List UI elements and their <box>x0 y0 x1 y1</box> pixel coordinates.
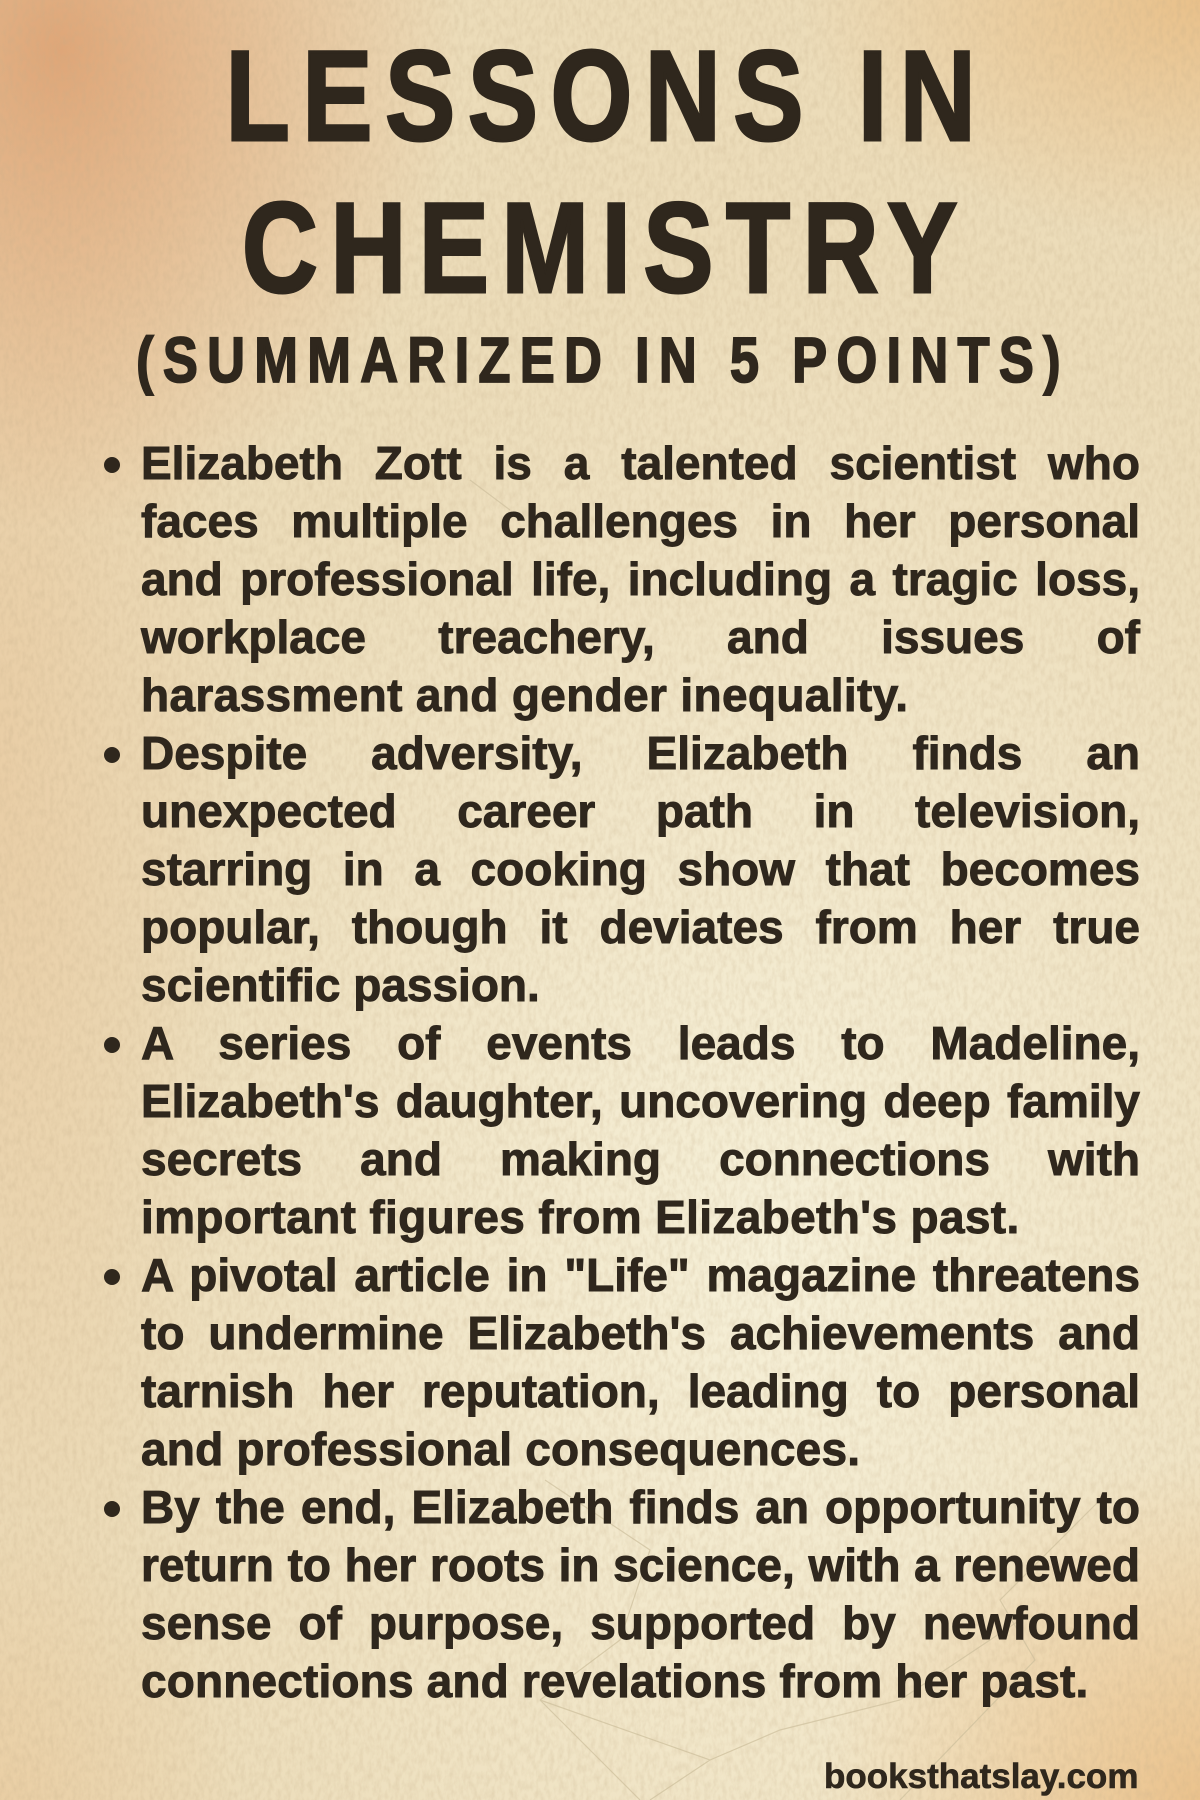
bullet point 4: A pivotal article in "Life" magazine threatens <box>141 1249 1140 1301</box>
bullet point 1: Elizabeth Zott is a talented scientist who <box>141 437 1140 489</box>
bullet point 1 <box>104 437 1140 721</box>
bullet point 4: to undermine Elizabeth's achievements and <box>141 1307 1140 1359</box>
bullet point 3: secrets and making connections with <box>141 1133 1140 1185</box>
website credit: booksthatslay.com <box>824 1757 1138 1796</box>
bullet point 3: Elizabeth's daughter, uncovering deep family <box>141 1075 1140 1127</box>
bullet point 1: workplace treachery, and issues of <box>141 611 1140 663</box>
bullet point 2: scientific passion. <box>141 959 540 1011</box>
bullet point 1: and professional life, including a tragic loss, <box>141 553 1140 605</box>
bullet point 2 <box>104 727 1140 1011</box>
bullet point 5: By the end, Elizabeth finds an opportunity to <box>141 1481 1140 1533</box>
bullet point 4 <box>104 1249 1140 1475</box>
bullet point 5: connections and revelations from her past. <box>141 1655 1088 1707</box>
subtitle: (SUMMARIZED IN 5 POINTS) <box>136 324 1070 396</box>
bullet point 1: faces multiple challenges in her personal <box>141 495 1140 547</box>
bullet point 2: Despite adversity, Elizabeth finds an <box>141 727 1140 779</box>
bullet point 5 <box>104 1481 1140 1707</box>
bullet point 1: harassment and gender inequality. <box>141 669 908 721</box>
bullet point 3: important figures from Elizabeth's past. <box>141 1191 1020 1243</box>
bullet point 5: return to her roots in science, with a renewed <box>141 1539 1140 1591</box>
title line 1: LESSONS IN <box>226 25 988 168</box>
bullet point 2: popular, though it deviates from her true <box>141 901 1140 953</box>
bullet point 3 <box>104 1017 1140 1243</box>
bullet point 2: starring in a cooking show that becomes <box>141 843 1140 895</box>
bullet point 4: and professional consequences. <box>141 1423 860 1475</box>
bullet point 2: unexpected career path in television, <box>141 785 1140 837</box>
bullet point 4: tarnish her reputation, leading to personal <box>141 1365 1140 1417</box>
bullet point 5: sense of purpose, supported by newfound <box>141 1597 1140 1649</box>
title line 2: CHEMISTRY <box>242 177 970 320</box>
bullet point 3: A series of events leads to Madeline, <box>141 1017 1140 1069</box>
